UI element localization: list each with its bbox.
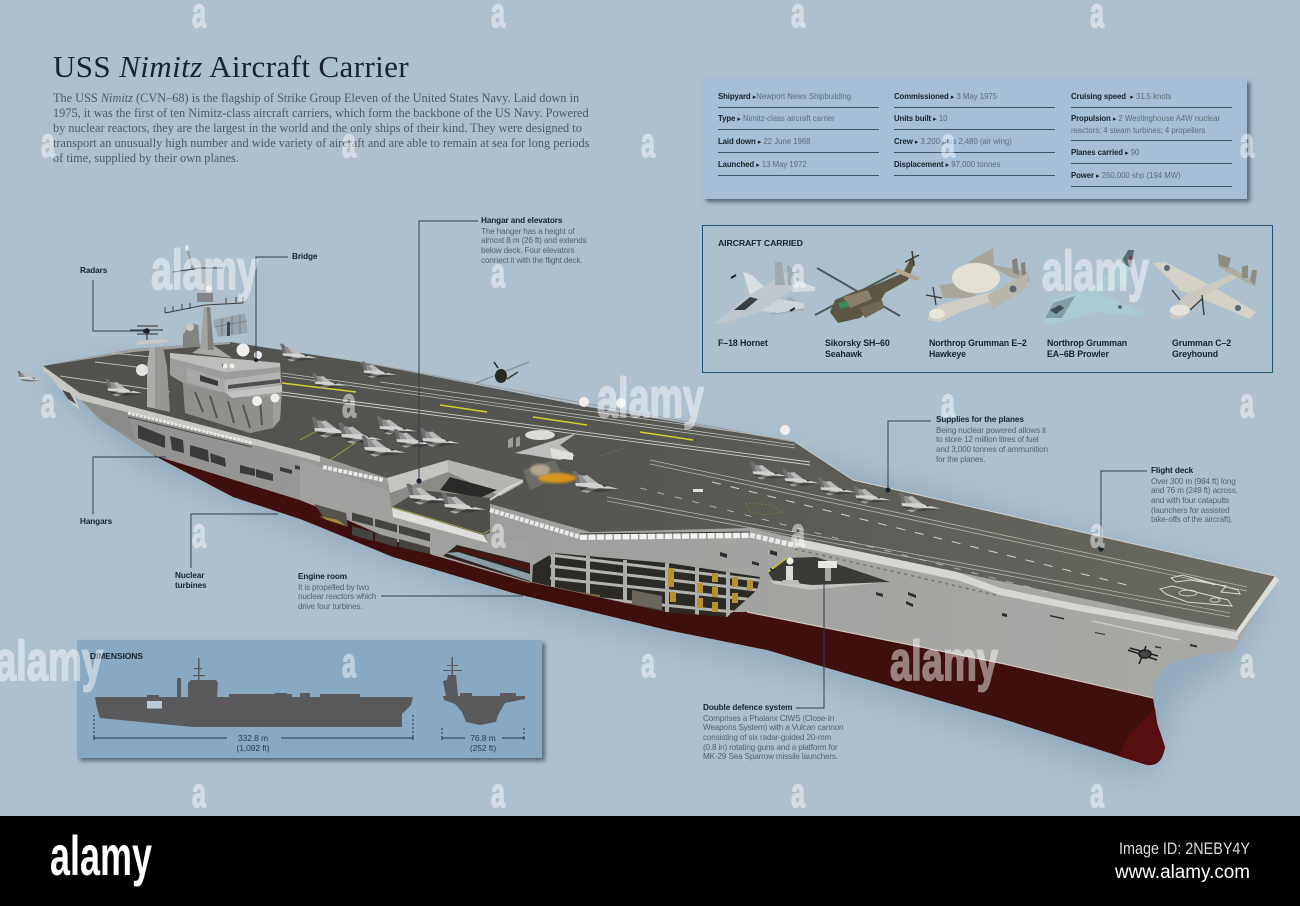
domes	[222, 344, 790, 435]
callout: hangar and elevators: below deck. Four elevators	[481, 246, 574, 255]
watermarks: a	[641, 639, 655, 686]
label: Hawkeye: Northrop Grumman E–2	[929, 338, 1027, 348]
title: USS Nimitz Aircraft Carrier	[53, 49, 409, 84]
label: Prowler: EA–6B Prowler	[1047, 349, 1109, 359]
side rails	[128, 413, 1000, 596]
watermarks: a	[941, 119, 955, 166]
spec: units built: Units built ▸ 10	[894, 114, 947, 123]
intro text: by nuclear reactors, they are the largest in the world and the only ships of their kind. They were designed to	[53, 121, 582, 135]
watermarks: a	[1090, 509, 1104, 556]
callout: supplies	[936, 415, 1048, 464]
mesh radar panel	[213, 313, 248, 337]
panel: specifications	[703, 79, 1247, 199]
helicopter in flight	[476, 362, 529, 383]
callout: double defence system: Weapons System) with a Vulcan cannon	[703, 723, 843, 732]
elevator edge lines	[300, 428, 355, 460]
stern elevator	[48, 372, 80, 410]
spec: shipyard: Shipyard ▸Newport News Shipbuilding	[718, 92, 851, 101]
hangar bay and elevator cut-out	[387, 460, 523, 543]
main mast	[165, 245, 248, 350]
spec: cruising speed: Cruising speed ▸ 31.5 knots	[1071, 92, 1172, 101]
island tower with radars	[130, 326, 170, 412]
E-2 on deck	[508, 430, 577, 460]
aircraft on deck	[18, 344, 941, 514]
watermarks: a	[941, 379, 955, 426]
panel: dimensions	[77, 640, 542, 758]
bridge leader	[256, 257, 288, 360]
turbines leader	[191, 514, 278, 568]
deck number 68	[1171, 575, 1240, 594]
spec: power: Power ▸ 260,000 shp (194 MW)	[1071, 171, 1181, 180]
watermarks: a	[641, 119, 655, 166]
callout: supplies: to store 12 million litres of fuel	[936, 435, 1039, 444]
callout: flight deck: and with four catapults	[1151, 496, 1229, 505]
callout: hangar and elevators: The hanger has a height of	[481, 227, 574, 236]
ship shadow	[39, 359, 1271, 780]
hangars leader	[93, 457, 166, 514]
watermarks: alamy	[890, 629, 998, 692]
panel: aircraft carried	[702, 225, 1273, 373]
stairs and equipment	[314, 504, 348, 527]
defence leader	[796, 580, 824, 708]
spec: crew: Crew ▸ 3,200 plus 2,480 (air wing)	[894, 137, 1012, 146]
label: Prowler	[1047, 338, 1127, 359]
flight deck	[43, 342, 1275, 630]
watermarks: a	[791, 769, 805, 816]
side profile silhouette	[95, 658, 413, 727]
intro text: of time, supplied by their own planes.	[53, 151, 239, 165]
hull side details	[720, 550, 1197, 648]
red hull top line	[747, 612, 1153, 698]
hull: grey side	[43, 349, 1275, 698]
callout: hangar and elevators: connect it with the flight deck.	[481, 256, 583, 265]
spec: propulsion: Propulsion ▸ 2 Westinghouse A4W nuclear	[1071, 114, 1220, 123]
island superstructure	[170, 345, 282, 433]
beam label	[470, 733, 496, 753]
flight deck leader	[1101, 471, 1147, 549]
front profile silhouette	[443, 657, 525, 725]
label: Seahawk: Sikorsky SH–60	[825, 338, 890, 348]
label: Seahawk	[825, 338, 890, 359]
deck markings	[60, 353, 1247, 617]
website: www.alamy.com	[1114, 862, 1250, 883]
engine room	[443, 545, 530, 582]
image id: Image ID: 2NEBY4Y	[1119, 839, 1250, 858]
intro text: 1975, it was the first of ten Nimitz-class aircraft carriers, which form the backbone of the US Navy. Powered	[53, 106, 589, 120]
hangar leader	[419, 221, 478, 481]
callout: flight deck: Over 300 m (984 ft) long	[1151, 477, 1236, 486]
callout: nuclear turbines: turbines	[175, 581, 206, 590]
callout: hangar and elevators: almost 8 m (26 ft) and extends	[481, 236, 586, 245]
aircraft: Sikorsky SH-60 Seahawk	[815, 251, 920, 323]
cut deck compartments	[352, 512, 430, 554]
explosion on elevator	[523, 460, 576, 490]
label: Prowler: Northrop Grumman	[1047, 338, 1127, 348]
watermarks: a	[192, 769, 206, 816]
callout: flight deck: (launchers for assisted	[1151, 506, 1229, 515]
panel heading: AIRCRAFT CARRIED	[718, 238, 803, 248]
sea sparrow platform	[768, 557, 890, 590]
watermarks: a	[1240, 379, 1254, 426]
length label	[236, 733, 270, 753]
callout: double defence system: MK-29 Sea Sparrow missile launchers.	[703, 752, 838, 761]
callout: hangar and elevators: Hangar and elevators	[481, 216, 562, 225]
white runway lines	[282, 392, 810, 465]
watermarks: a	[491, 249, 505, 296]
beam label: (252 ft)	[470, 743, 496, 753]
intro text: The USS Nimitz (CVN–68) is the flagship of Strike Group Eleven of the United States Navy. Laid down in	[53, 91, 579, 105]
callout: engine room: Engine room	[298, 572, 347, 581]
ship cutaway illustration	[18, 220, 1279, 782]
callout: flight deck: Flight deck	[1151, 466, 1193, 475]
footer logo: alamy	[50, 824, 152, 887]
watermarks: alamy	[1042, 239, 1149, 302]
watermarks: a	[1240, 119, 1254, 166]
watermarks: a	[791, 249, 805, 296]
callout: double defence system: consisting of six radar-guided 20-mm	[703, 733, 831, 742]
label: F-18: F–18 Hornet	[718, 338, 768, 348]
spec: planes carried: Planes carried ▸ 90	[1071, 148, 1139, 157]
supplies leader	[888, 421, 931, 490]
watermarks: alamy	[151, 238, 258, 301]
hull: red lower part	[153, 455, 1165, 765]
callout: supplies: for the planes.	[936, 455, 985, 464]
spec: launched: Launched ▸ 13 May 1972	[718, 160, 807, 169]
callout: bridge: Bridge	[292, 252, 317, 261]
elevator platform	[392, 490, 490, 535]
deck edges	[43, 342, 1279, 640]
phalanx gun	[781, 557, 800, 584]
footer bar	[0, 816, 1300, 906]
spec: laid down: Laid down ▸ 22 June 1968	[718, 137, 810, 146]
callout: flight deck: take-offs of the aircraft).	[1151, 515, 1233, 524]
callout: double defence system	[703, 703, 843, 761]
hangar section wall	[300, 460, 530, 583]
watermarks: a	[41, 119, 55, 166]
label: Hawkeye	[929, 338, 1027, 359]
callout: nuclear turbines: Nuclear	[175, 571, 204, 580]
callout: engine room: nuclear reactors which	[298, 592, 376, 601]
watermarks: a	[1090, 769, 1104, 816]
spec: displacement: Displacement ▸ 97,000 tonnes	[894, 160, 1000, 169]
spec: commissioned: Commissioned ▸ 3 May 1975	[894, 92, 997, 101]
forward cutaway	[532, 553, 760, 617]
panel heading: DIMENSIONS	[90, 651, 143, 661]
callout: flight deck	[1151, 466, 1238, 524]
callout: supplies: and 3,000 tonnes of ammunition	[936, 445, 1048, 454]
catapult tracks	[607, 497, 1230, 617]
aircraft: F-18 Hornet	[713, 262, 815, 325]
watermarks: a	[491, 769, 505, 816]
callout: supplies: Being nuclear powered allows it	[936, 426, 1046, 435]
callout: engine room: It is propelled by two	[298, 583, 369, 592]
callout: double defence system: Comprises a Phalanx CIWS (Close-In	[703, 714, 834, 723]
hangar openings on stern side	[138, 425, 302, 481]
yellow centreline	[282, 383, 693, 440]
callout: radars: Radars	[80, 266, 107, 275]
aircraft: Grumman C-2 Greyhound	[1153, 254, 1257, 319]
aircraft: Northrop Grumman EA-6B Prowler	[1043, 250, 1144, 325]
stern lower plate	[80, 400, 135, 440]
watermarks: a	[342, 639, 356, 686]
label: Greyhound	[1172, 338, 1231, 359]
engine leader	[381, 595, 523, 597]
callout: double defence system: Double defence system	[703, 703, 792, 712]
watermarks: a	[41, 379, 55, 426]
label: Seahawk: Seahawk	[825, 349, 862, 359]
intro text: transport an unusually high number and wide variety of aircraft and are able to remain at sea for long periods	[53, 136, 589, 150]
callout: double defence system: (0.8 in) rotating guns and a platform for	[703, 743, 838, 752]
spec: propulsion: reactors; 4 steam turbines; 4 propellers	[1071, 126, 1205, 135]
spec: propulsion	[1071, 114, 1220, 135]
radars leader	[93, 280, 145, 331]
intro text	[53, 91, 589, 165]
label: Greyhound: Greyhound	[1172, 349, 1218, 359]
length label: 332.8 m	[238, 733, 268, 743]
dimension lines	[94, 715, 524, 740]
watermarks: a	[1240, 639, 1254, 686]
length label: (1,092 ft)	[236, 743, 270, 753]
label: Hawkeye: Hawkeye	[929, 349, 966, 359]
bow bulb highlight	[1118, 708, 1165, 765]
callout: supplies: Supplies for the planes	[936, 415, 1024, 424]
callout: flight deck: and 76 m (249 ft) across,	[1151, 486, 1238, 495]
callout: nuclear turbines	[175, 571, 206, 590]
hangar opening	[147, 701, 162, 708]
bow helicopter	[1128, 646, 1158, 664]
orange landing marks	[600, 448, 783, 515]
watermarks: a	[791, 509, 805, 556]
leader lines	[93, 221, 1147, 708]
callout: hangar and elevators	[481, 216, 586, 265]
beam label: 76.8 m	[470, 733, 496, 743]
watermarks: a	[342, 379, 356, 426]
leader dots	[143, 329, 1104, 552]
spec: type: Type ▸ Nimitz-class aircraft carrier	[718, 114, 835, 123]
watermarks: alamy	[597, 366, 704, 429]
callout: hangars: Hangars	[80, 517, 112, 526]
watermarks: a	[192, 509, 206, 556]
callout: engine room: drive four turbines.	[298, 602, 362, 611]
missile launcher	[818, 561, 837, 581]
watermarks: a	[491, 509, 505, 556]
callout: engine room	[298, 572, 376, 611]
aircraft: Northrop Grumman E-2 Hawkeye	[926, 248, 1030, 322]
watermarks: a	[342, 119, 356, 166]
label: Greyhound: Grumman C–2	[1172, 338, 1231, 348]
